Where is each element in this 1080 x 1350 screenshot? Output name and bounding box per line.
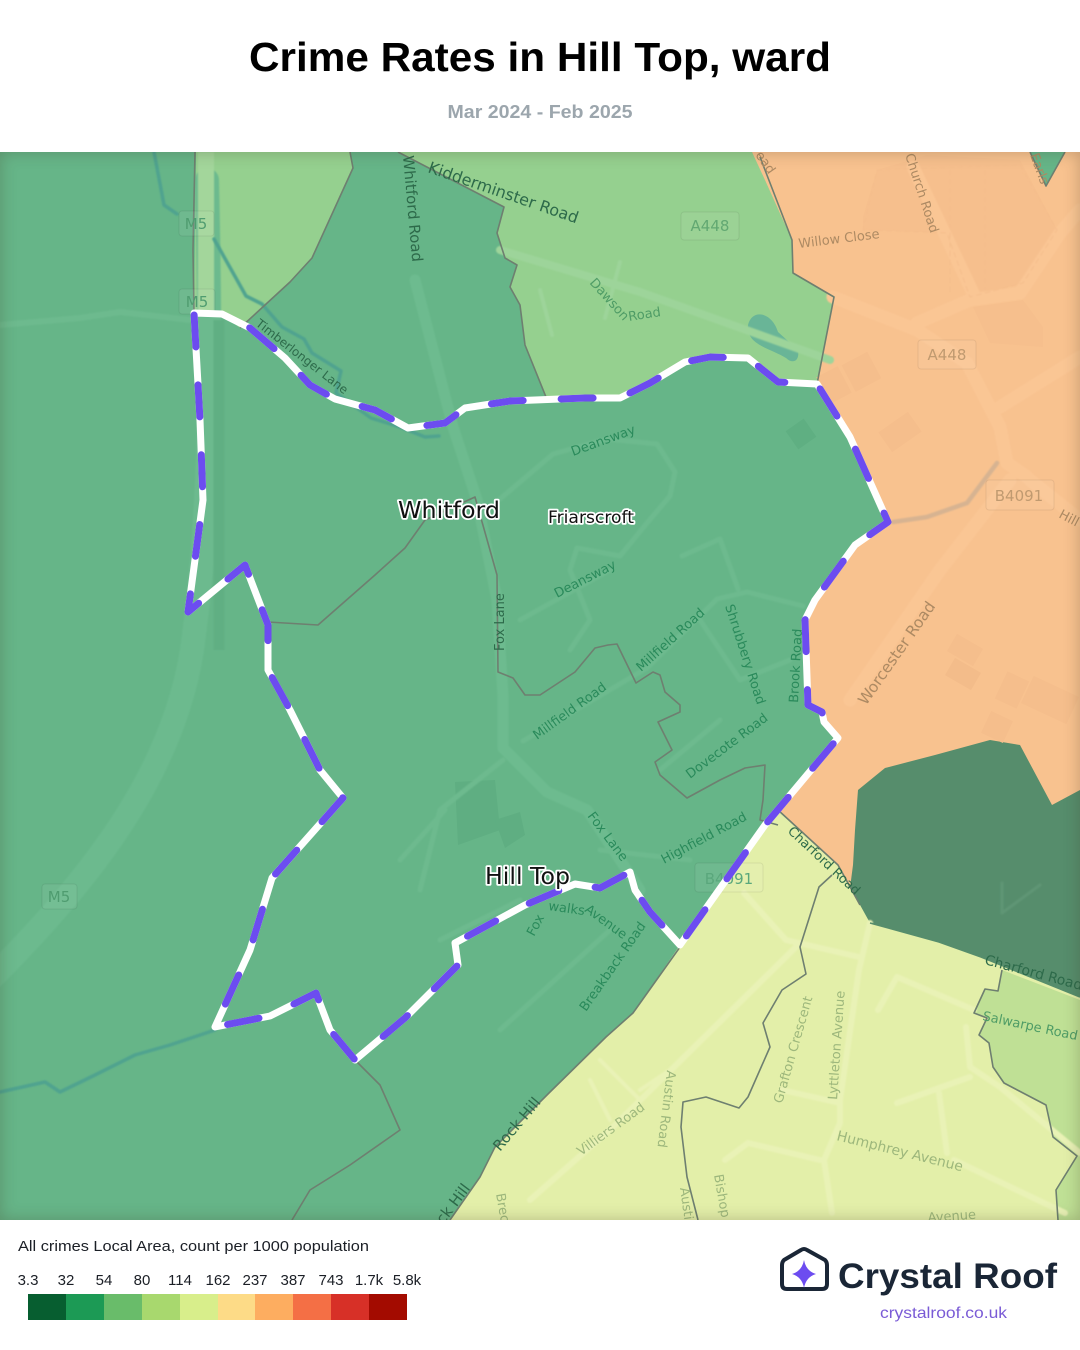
- road labels: Dawson: [586, 276, 632, 324]
- legend values: 162: [205, 1272, 231, 1289]
- road labels: Dovecote Road: [683, 711, 771, 782]
- place labels: Whitford: [398, 498, 500, 524]
- road labels: Lyttleton Avenue: [826, 990, 849, 1100]
- road labels: Whitford Road: [399, 155, 426, 263]
- legend values: 237: [242, 1272, 268, 1289]
- road labels: Deansway: [569, 423, 638, 460]
- road labels: Bishop: [710, 1173, 732, 1219]
- road shields: A448: [928, 346, 966, 364]
- legend values: 80: [134, 1272, 150, 1289]
- footer: [18, 1238, 1058, 1322]
- waterways: [0, 152, 997, 1092]
- road labels: Fox Lane: [493, 593, 508, 651]
- road labels: Highfield Road: [659, 810, 749, 868]
- road labels: Austin Road: [654, 1070, 678, 1148]
- area boundaries: [193, 152, 1080, 1220]
- road labels: Millfield Road: [531, 680, 610, 743]
- logo wordmark: Crystal Roof: [838, 1257, 1057, 1296]
- road labels: Charford Road: [784, 824, 863, 899]
- road shields: M5: [185, 215, 207, 233]
- road shields: A448: [691, 217, 729, 235]
- road labels: Grafton Crescent: [771, 995, 816, 1105]
- place labels: [398, 498, 634, 890]
- legend values: 1.7k: [355, 1272, 384, 1289]
- road labels: Kidderminster Road: [426, 158, 581, 227]
- road shields: B4091: [705, 870, 753, 888]
- place labels: Hill Top: [485, 864, 570, 890]
- road labels: Earls: [1026, 152, 1051, 187]
- legend title: All crimes Local Area, count per 1000 population: [18, 1238, 369, 1255]
- map edge shading: [0, 152, 1080, 1220]
- road labels: Millfield Road: [634, 606, 708, 675]
- road labels: Humphrey Avenue: [835, 1128, 965, 1175]
- road labels: Fox: [524, 912, 548, 939]
- legend values: 743: [318, 1272, 344, 1289]
- road labels: Timberlonger Lane: [252, 316, 351, 397]
- road labels: Fox Lane: [584, 809, 631, 865]
- place labels: Friarscroft: [548, 508, 634, 528]
- legend values: 54: [96, 1272, 112, 1289]
- road labels: Deansway: [552, 558, 619, 602]
- road shields: M5: [48, 888, 70, 906]
- road labels: Willow Close: [798, 227, 880, 252]
- road labels: Rock Hill: [489, 1094, 544, 1155]
- road shields: B4091: [995, 487, 1043, 505]
- road labels: Villiers Road: [575, 1100, 648, 1159]
- road labels: walks: [547, 899, 586, 919]
- website: crystalroof.co.uk: [880, 1305, 1008, 1322]
- road labels: Breakback Road: [577, 920, 650, 1014]
- building footprints: [455, 155, 1079, 848]
- road labels: Salwarpe Road: [981, 1009, 1079, 1044]
- legend values: [18, 1272, 422, 1289]
- legend values: 387: [280, 1272, 306, 1289]
- map panel: [0, 152, 1080, 1220]
- road labels: Brook Road: [787, 628, 806, 703]
- legend values: 3.3: [18, 1272, 38, 1289]
- road labels: Shrubbery Road: [721, 603, 768, 707]
- road labels: Road: [627, 305, 662, 325]
- date range: Mar 2024 - Feb 2025: [448, 101, 632, 122]
- road labels: Church Road: [901, 152, 941, 235]
- title: [249, 34, 831, 122]
- road shields: [42, 211, 1054, 909]
- ward boundary: [188, 313, 888, 1060]
- road network: [0, 152, 1080, 1213]
- legend values: 32: [58, 1272, 74, 1289]
- legend values: 114: [168, 1272, 192, 1289]
- road labels: [252, 149, 1080, 1265]
- legend colour scale: [28, 1294, 407, 1320]
- road labels: Avenue: [582, 902, 630, 943]
- logo icon: [782, 1249, 827, 1289]
- road labels: Worcester Road: [855, 598, 939, 708]
- road shields: M5: [186, 293, 208, 311]
- legend values: 5.8k: [393, 1272, 422, 1289]
- choropleth areas: [0, 152, 1080, 1220]
- heading: Crime Rates in Hill Top, ward: [249, 34, 831, 80]
